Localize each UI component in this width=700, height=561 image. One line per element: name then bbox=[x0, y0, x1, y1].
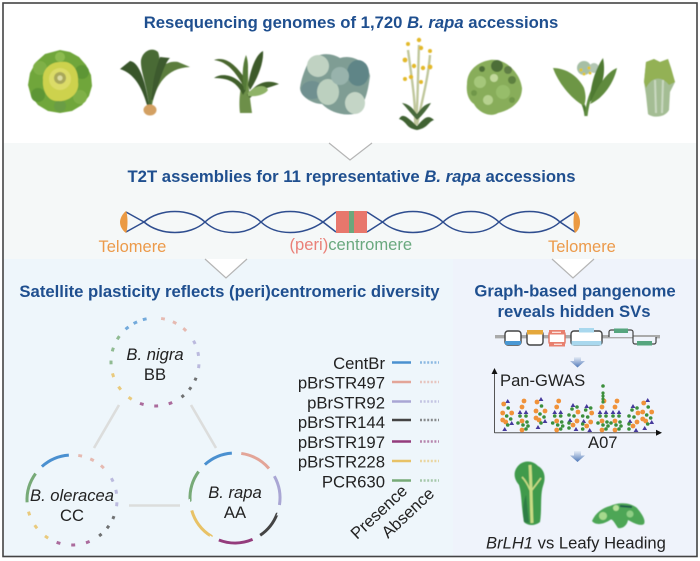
icon: round heading cabbage bbox=[28, 50, 92, 113]
axes bbox=[492, 368, 662, 436]
icon: bok choy with flowers bbox=[553, 58, 617, 116]
left telomere cap bbox=[120, 211, 128, 233]
legend column: presence: Presence bbox=[347, 481, 411, 543]
SV: inversion box bbox=[549, 330, 565, 346]
circle: B. nigra bbox=[93, 300, 217, 424]
arrow: chevron to pangenome panel bbox=[552, 259, 594, 278]
SV: translocation lower bbox=[633, 337, 656, 346]
arrow: chevron to satellite panel bbox=[205, 259, 247, 278]
icon: flowering plant bbox=[399, 38, 434, 130]
triangle connectors bbox=[94, 405, 216, 506]
strand pair: right arm bbox=[367, 212, 575, 232]
circle: B. oleracea bbox=[8, 436, 136, 561]
label: centromere: (peri)centromere bbox=[290, 235, 412, 254]
label: B. oleracea CC: CC bbox=[60, 506, 84, 525]
circle: B. rapa bbox=[171, 434, 299, 561]
legend absence lines bbox=[420, 362, 439, 480]
background: satellite panel bbox=[3, 259, 453, 556]
SV: insertion box bbox=[527, 330, 543, 345]
background: T2T section bbox=[3, 143, 697, 259]
label: right telomere: Telomere bbox=[548, 238, 616, 256]
icon: turnip plant bbox=[120, 50, 190, 116]
heading: T2T assemblies: T2T assemblies for 11 representative B. rapa accessions bbox=[127, 167, 576, 186]
label: B. nigra BB: B. nigra bbox=[126, 345, 184, 364]
icon: leafy plant bbox=[214, 51, 279, 113]
legend presence lines bbox=[392, 362, 411, 480]
chromosome diagram bbox=[120, 211, 580, 233]
legend labels: pBrSTR92 bbox=[307, 394, 385, 412]
arrow: track to GWAS bbox=[570, 357, 585, 368]
heading: graph-based pangenome: Graph-based pangenome bbox=[474, 282, 676, 300]
SV: duplication box bbox=[571, 328, 602, 346]
heading: graph-based pangenome: reveals hidden SVs bbox=[497, 302, 651, 321]
chart: Pan-GWAS manhattan plot bbox=[492, 368, 662, 452]
centromere block bbox=[336, 211, 367, 233]
right telomere cap bbox=[574, 211, 580, 233]
label: BrLH1 vs Leafy Heading: BrLH1 vs Leafy Heading bbox=[486, 534, 666, 552]
legend bbox=[298, 354, 439, 543]
SV: translocation upper bbox=[609, 328, 633, 337]
strand pair: left arm bbox=[126, 212, 336, 232]
icon: blue-green cabbage bbox=[300, 54, 370, 115]
legend column: absence: Absence bbox=[378, 484, 438, 542]
pangenome SV track bbox=[495, 328, 660, 346]
legend labels: PCR630 bbox=[322, 472, 385, 492]
background: pangenome panel bbox=[453, 259, 697, 556]
label: B. oleracea CC: B. oleracea bbox=[30, 486, 114, 505]
arrow: chevron to T2T bbox=[329, 143, 372, 160]
icon: upright bok choy bbox=[515, 462, 545, 525]
scatter points bbox=[500, 384, 654, 432]
label: B. rapa AA: B. rapa bbox=[208, 483, 262, 502]
heading: resequencing: Resequencing genomes of 1,720 B. rapa accessions bbox=[144, 13, 558, 32]
legend labels: pBrSTR497 bbox=[298, 374, 385, 392]
legend labels: pBrSTR228 bbox=[298, 452, 385, 472]
legend labels: CentBr bbox=[333, 354, 385, 373]
label: Pan-GWAS: Pan-GWAS bbox=[500, 371, 585, 390]
legend labels: pBrSTR144 bbox=[298, 413, 385, 432]
arrow: GWAS to gene bbox=[570, 451, 585, 462]
icon: spreading leafy plant bbox=[592, 503, 645, 528]
label: B. nigra BB: BB bbox=[144, 365, 166, 384]
label: A07: A07 bbox=[588, 433, 618, 452]
heading: satellite plasticity: Satellite plasticity reflects (peri)centromeric diversity bbox=[19, 282, 440, 301]
background: top section bbox=[3, 3, 697, 143]
icon: frilly lettuce bbox=[467, 60, 522, 115]
label: B. rapa AA: AA bbox=[224, 503, 247, 522]
legend labels: pBrSTR197 bbox=[298, 433, 385, 452]
SV: deletion box bbox=[505, 331, 521, 345]
label: left telomere: Telomere bbox=[98, 238, 166, 256]
legend labels bbox=[298, 354, 385, 492]
icon: napa cabbage bbox=[644, 59, 675, 117]
